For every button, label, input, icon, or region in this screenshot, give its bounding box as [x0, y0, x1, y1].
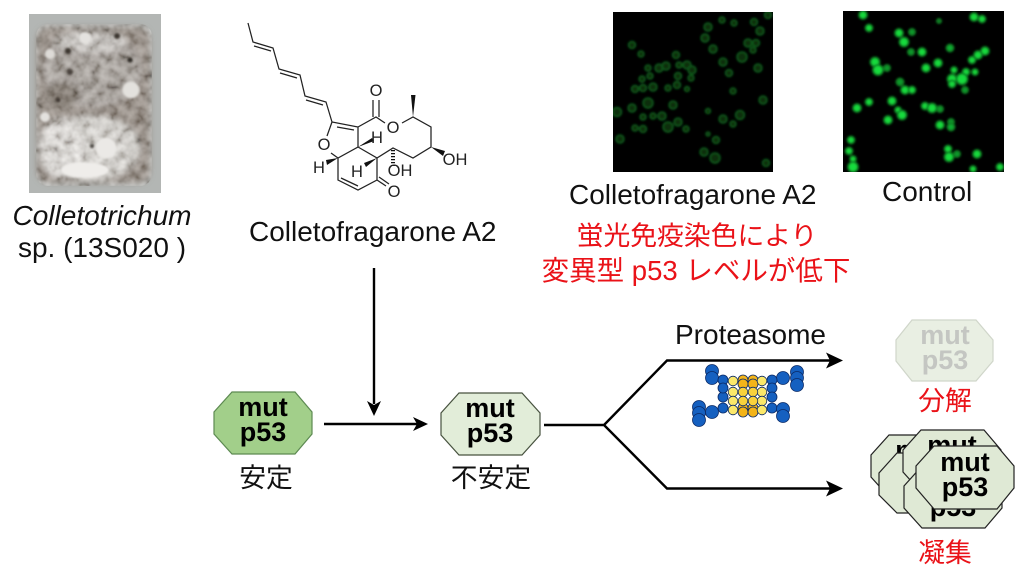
red finding text: 蛍光免疫染色により: [577, 221, 817, 251]
protein: unstable mut p53: [441, 393, 540, 455]
protein: unstable mut p53: mut: [465, 393, 515, 423]
icon: proteasome: [692, 364, 804, 426]
red finding text: 変異型 p53 レベルが低下: [542, 255, 850, 286]
texture: [36, 24, 152, 186]
protein: degraded mut p53: [896, 320, 993, 381]
protein: stable mut p53: [214, 392, 312, 454]
chemical structure: Colletofragarone A2: O: [370, 82, 383, 100]
chemical structure: Colletofragarone A2: H: [371, 129, 383, 147]
protein cluster: aggregated mut p53: [871, 430, 1014, 528]
protein cluster: aggregated mut p53: p53: [942, 472, 988, 502]
chemical structure: Colletofragarone A2: OH: [443, 151, 467, 169]
micrograph captions: Colletofragarone A2: [569, 179, 817, 210]
protein cluster: aggregated mut p53: p53: [930, 492, 976, 522]
label: proteasome: Proteasome: [675, 319, 826, 350]
label: aggregation: 凝集: [918, 538, 972, 568]
protein cluster: aggregated mut p53: mut: [927, 430, 977, 460]
arrow: stable to unstable: [324, 417, 428, 431]
arrow: compound to reaction: [367, 268, 381, 416]
protein: stable mut p53: p53: [240, 417, 286, 447]
micrograph captions: Control: [882, 176, 972, 207]
micrograph: Colletofragarone A2 treated: [612, 12, 773, 172]
photo: fungal culture: [29, 14, 161, 193]
stereo wedge bonds: [326, 95, 445, 167]
label: stable: 安定: [239, 463, 293, 493]
micrograph: control: [843, 11, 1004, 172]
micrograph captions: [569, 176, 972, 210]
protein: degraded mut p53: mut: [920, 320, 970, 350]
species label: [13, 200, 191, 263]
chemical structure: Colletofragarone A2: O: [387, 119, 400, 137]
chemical structure: Colletofragarone A2: [248, 23, 467, 201]
chemical structure: Colletofragarone A2: O: [388, 183, 401, 201]
chemical structure: Colletofragarone A2: H: [351, 163, 363, 181]
red finding text: [542, 221, 850, 286]
protein cluster: aggregated mut p53: mut: [895, 435, 945, 465]
chemical structure: Colletofragarone A2: H: [313, 159, 325, 177]
compound name: Colletofragarone A2: [249, 216, 497, 247]
protein: degraded mut p53: p53: [922, 345, 968, 375]
species label: sp. (13S020 ): [18, 232, 186, 263]
chemical structure: Colletofragarone A2: OH: [388, 162, 412, 180]
species label: Colletotrichum: [13, 200, 191, 231]
label: unstable: 不安定: [451, 463, 531, 493]
protein: unstable mut p53: p53: [467, 418, 513, 448]
branching pathway arrows: [544, 352, 843, 496]
chemical structure: Colletofragarone A2: O: [318, 136, 331, 154]
protein: stable mut p53: mut: [238, 392, 288, 422]
protein cluster: aggregated mut p53: mut: [940, 447, 990, 477]
label: degradation: 分解: [918, 386, 972, 416]
